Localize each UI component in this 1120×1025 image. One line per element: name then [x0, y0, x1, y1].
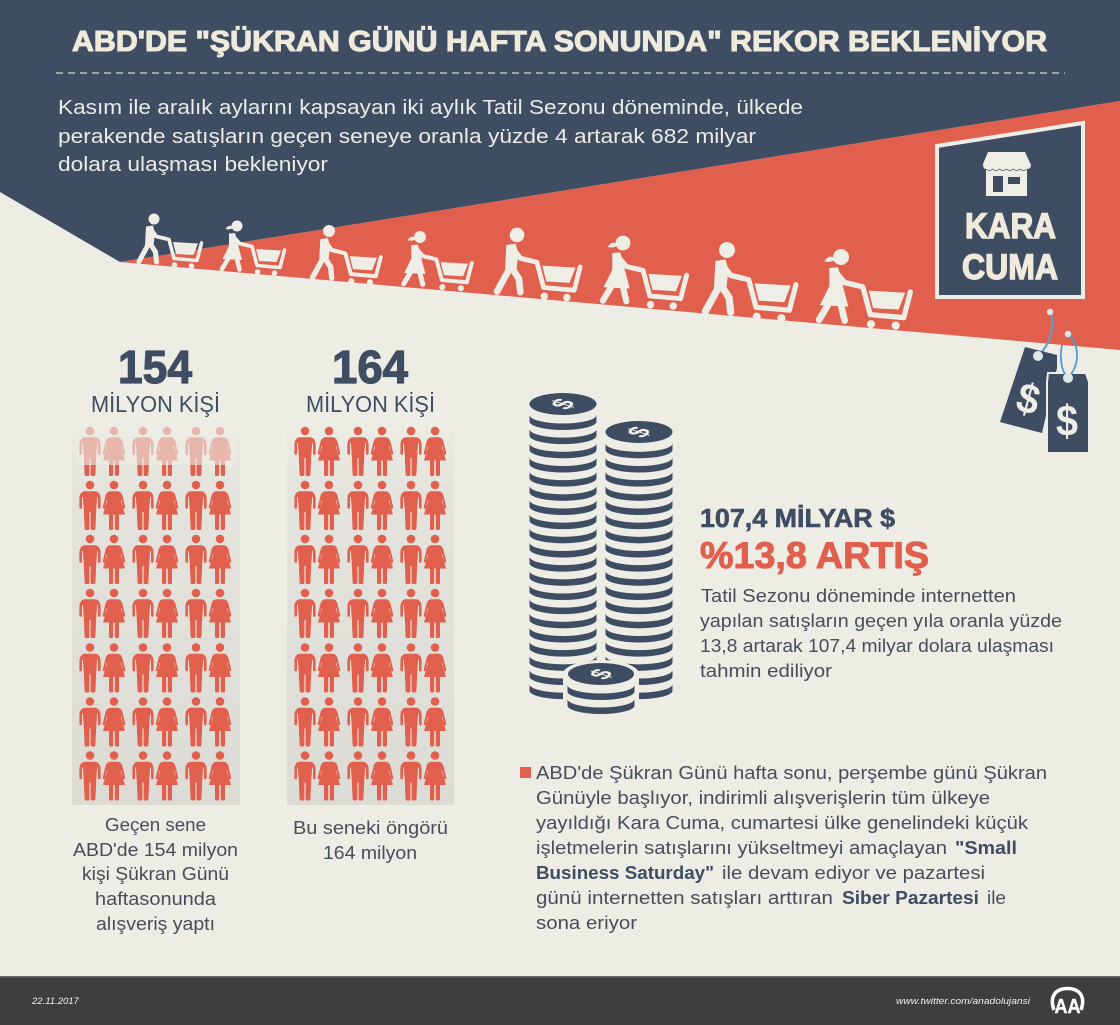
icon: price tags: $ — [1012, 373, 1045, 424]
caption: Geçen sene — [105, 815, 206, 835]
explanatory paragraph: ile — [987, 888, 1006, 908]
unit label: MİLYON KİŞİ — [91, 391, 220, 417]
online sales headline: 107,4 MİLYAR $ — [700, 503, 896, 533]
online sales percentage: %13,8 ARTIŞ — [700, 535, 929, 576]
explanatory paragraph: sona eriyor — [536, 913, 637, 933]
explanatory paragraph: ABD'de Şükran Günü hafta sonu, perşembe günü Şükran — [536, 763, 1047, 783]
caption — [293, 818, 448, 863]
title: ABD'DE "ŞÜKRAN GÜNÜ HAFTA SONUNDA" REKOR BEKLENİYOR — [72, 25, 1047, 58]
social handle: www.twitter.com/anadolujansi — [896, 996, 1031, 1007]
navy header band — [0, 0, 1120, 262]
explanatory paragraph: "Small — [955, 838, 1017, 858]
explanatory paragraph: işletmelerin satışlarını yükseltmeyi amaçlayan — [536, 838, 947, 858]
intro paragraph: perakende satışların geçen seneye oranla yüzde 4 artarak 682 milyar — [58, 125, 756, 148]
online sales description: Tatil Sezonu döneminde internetten — [701, 586, 1016, 606]
icon: price tags: $ — [1056, 397, 1078, 446]
right stack — [606, 421, 672, 699]
coin stacks — [530, 393, 672, 718]
explanatory paragraph: ile devam ediyor ve pazartesi — [722, 863, 985, 883]
caption — [73, 815, 238, 934]
icon: store — [983, 152, 1031, 196]
intro paragraph — [58, 96, 803, 176]
date: 22.11.2017 — [31, 996, 80, 1007]
explanatory paragraph: Siber Pazartesi — [842, 888, 979, 908]
pictogram grid — [294, 427, 446, 800]
explanatory paragraph: günü internetten satışları arttıran — [536, 888, 833, 908]
unit label: MİLYON KİŞİ — [306, 391, 435, 417]
footer bar — [0, 976, 1120, 1025]
intro paragraph: dolara ulaşması bekleniyor — [58, 153, 328, 176]
explanatory paragraph — [536, 763, 1047, 933]
left stack — [530, 393, 596, 699]
right stack: $ — [621, 423, 659, 441]
intro paragraph: Kasım ile aralık aylarını kapsayan iki aylık Tatil Sezonu döneminde, ülkede — [58, 96, 803, 119]
sign text — [962, 207, 1058, 287]
explanatory paragraph: yayıldığı Kara Cuma, cumartesi ülke genelindeki küçük — [536, 813, 1029, 833]
caption: 164 milyon — [323, 843, 417, 863]
online sales description: 13,8 artarak 107,4 milyar dolara ulaşması — [700, 636, 1054, 656]
pictogram grid — [76, 425, 236, 800]
figure: 164: 164 — [332, 341, 408, 393]
caption: Bu seneki öngörü — [293, 818, 448, 838]
front stack — [563, 660, 639, 718]
front stack: $ — [583, 666, 619, 682]
bullet — [520, 767, 531, 778]
sign: Kara Cuma — [937, 123, 1083, 297]
figure: 154: 154 — [118, 341, 192, 393]
red sloped band — [120, 101, 1120, 350]
icon: price tags — [1000, 309, 1089, 453]
online sales description: tahmin ediliyor — [700, 661, 832, 681]
online sales description — [700, 586, 1062, 681]
explanatory paragraph: Günüyle başlıyor, indirimli alışverişlerin tüm ülkeye — [536, 788, 990, 808]
online sales description: yapılan satışların geçen yıla oranla yüzde — [700, 611, 1062, 631]
caption: kişi Şükran Günü — [82, 864, 229, 884]
caption: ABD'de 154 milyon — [73, 840, 238, 860]
left stack: $ — [545, 395, 583, 413]
caption: haftasonunda — [95, 889, 217, 909]
shoppers with carts — [139, 214, 910, 330]
explanatory paragraph: Business Saturday" — [536, 863, 714, 883]
caption: alışveriş yaptı — [96, 914, 215, 934]
panel: 154 million people — [72, 341, 240, 934]
logo: AA: AA — [1054, 996, 1080, 1018]
sign text: KARA — [965, 207, 1056, 246]
sign text: CUMA — [962, 248, 1058, 287]
panel: 164 million people — [287, 341, 454, 863]
logo: AA — [1052, 988, 1083, 1018]
